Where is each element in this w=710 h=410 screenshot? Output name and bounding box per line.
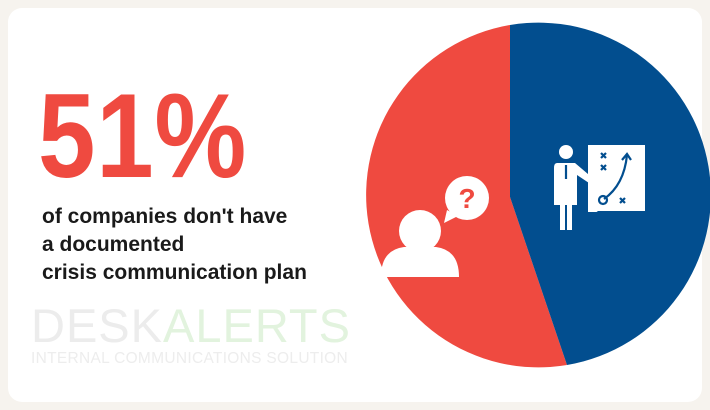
description text (42, 205, 307, 284)
logo watermark: INTERNAL COMMUNICATIONS SOLUTION (31, 350, 348, 367)
description text: a documented (42, 233, 184, 256)
icon: strategist at board (554, 145, 645, 230)
icon: person with question: ? (458, 183, 476, 214)
description text: of companies don't have (42, 205, 287, 228)
slice: blue 45% (510, 23, 710, 365)
description text: crisis communication plan (42, 261, 307, 284)
icon: person with question (381, 176, 489, 277)
headline statistic: 51% (38, 69, 247, 203)
slice: red 55% (366, 25, 567, 367)
logo watermark: DESKALERTS (31, 299, 351, 352)
